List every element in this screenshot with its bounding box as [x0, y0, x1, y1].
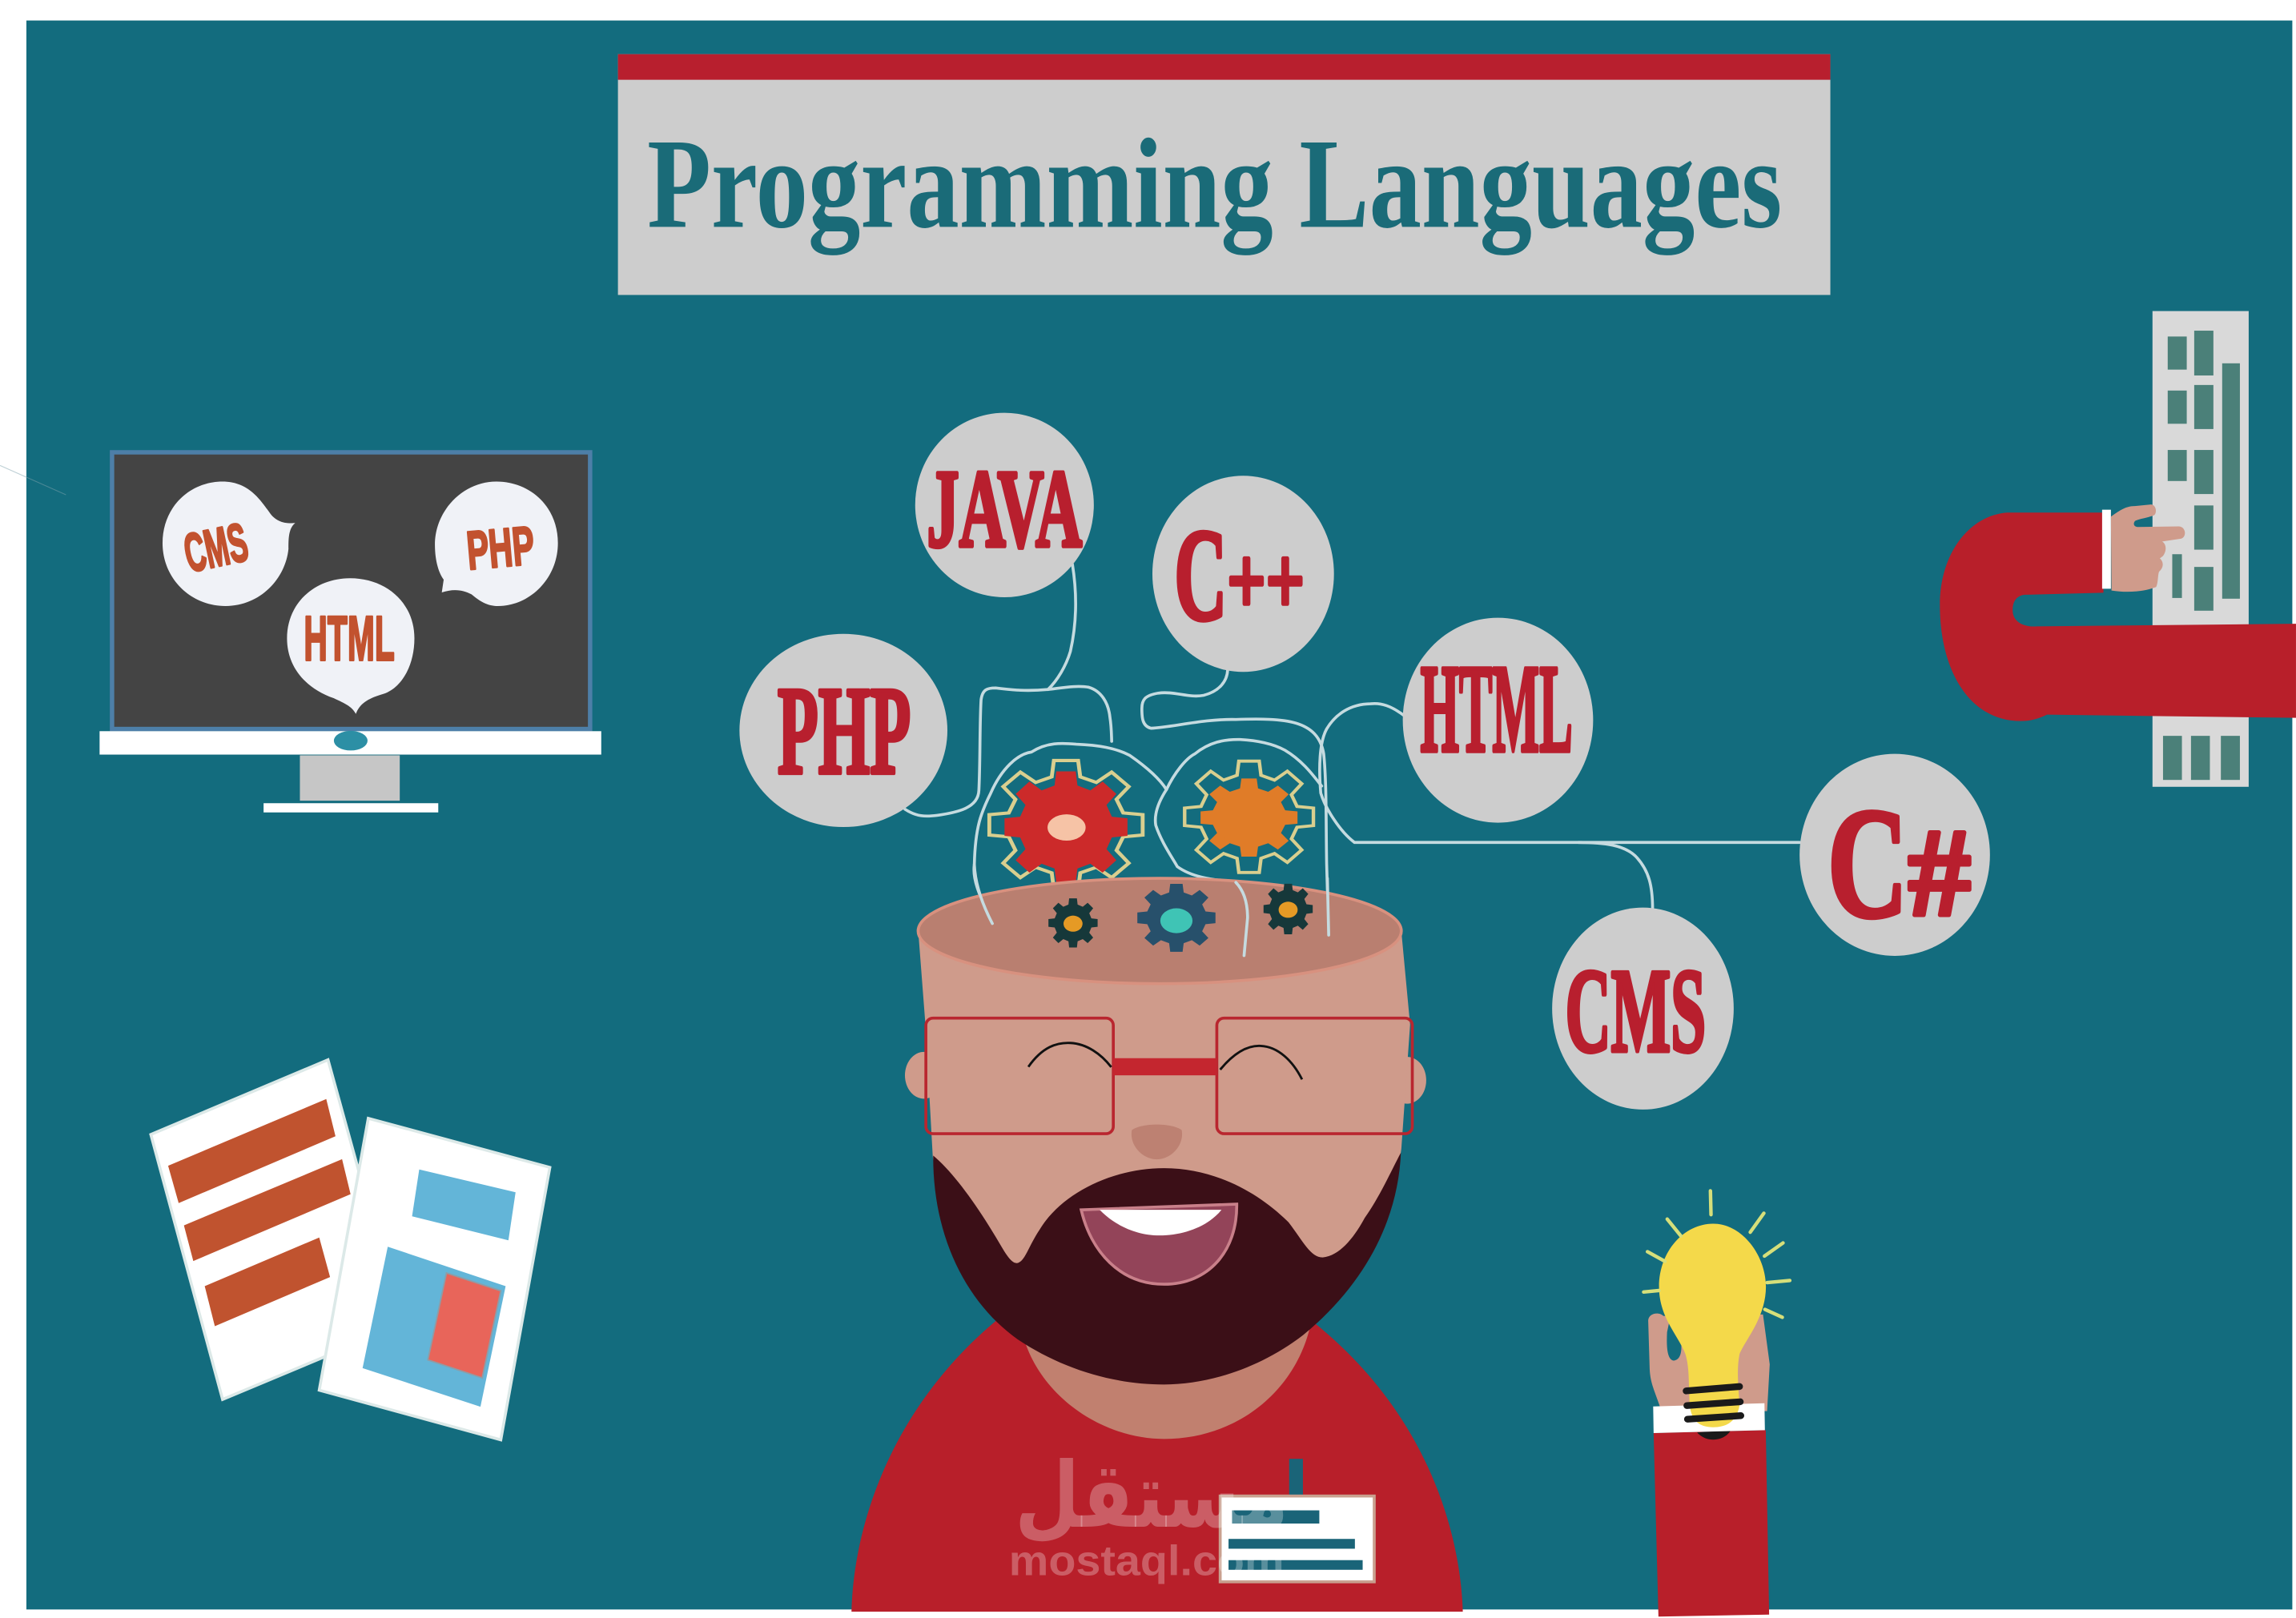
- bubble: C#: #: [1908, 804, 1971, 943]
- wires falling into head: [975, 865, 1329, 956]
- gears behind head: [989, 761, 1313, 889]
- bubble: C#: [1799, 754, 1990, 956]
- small dark gear right: [1264, 884, 1313, 934]
- monitor stand: [300, 755, 400, 801]
- bulb: [1659, 1224, 1766, 1427]
- wire: C++: [1142, 670, 1329, 935]
- bubble: JAVA: JAVA: [927, 448, 1082, 571]
- character: smiling eyes: [1028, 1043, 1302, 1079]
- illustration canvas: HTML: [1421, 640, 1573, 779]
- monitor foot: [263, 803, 438, 813]
- bubble: C++: ++: [1227, 528, 1305, 635]
- bulb stripes: [1686, 1387, 1741, 1419]
- documents icon: [151, 1060, 550, 1439]
- character: beard: [933, 1153, 1401, 1384]
- character: glasses: [926, 1018, 1413, 1134]
- wire: JAVA: [1048, 564, 1076, 689]
- wire: HTML and C#: [1320, 704, 1799, 842]
- wire: PHP: [905, 686, 1112, 816]
- speech bubble: CMS: [163, 482, 296, 606]
- back paper with bars: [151, 1060, 401, 1399]
- character: nose: [1132, 1125, 1182, 1159]
- bubble: CMS: CMS: [1566, 945, 1706, 1078]
- watermark: مستقل: [1015, 1443, 1289, 1548]
- character: face: [918, 929, 1410, 1383]
- bubble: CMS: [1552, 908, 1734, 1110]
- character: mouth: [1081, 1204, 1236, 1284]
- medium blue gear: [1137, 884, 1216, 952]
- white cuff: [1653, 1403, 1765, 1433]
- white cuff: [2102, 510, 2111, 588]
- bubble: PHP: PHP: [778, 661, 911, 801]
- hand holding light bulb: [1643, 1190, 1790, 1616]
- small dark gear left: [1048, 898, 1098, 948]
- hand pressing keyboard: [1940, 311, 2296, 787]
- bulb hand: [1648, 1314, 1770, 1411]
- small gears in head: [1048, 884, 1313, 952]
- bubble: JAVA: [915, 413, 1094, 597]
- character: shirt: [851, 1319, 1463, 1612]
- pointing hand: [2111, 504, 2185, 592]
- title text: Programming Languages: [647, 112, 1782, 255]
- lobe wires around gears: [974, 740, 1321, 956]
- character: neck: [1020, 1325, 1310, 1439]
- ID badge: [1220, 1496, 1374, 1582]
- bubble: C#: C: [1828, 776, 1908, 951]
- speech bubble: PHP: PHP: [464, 516, 537, 581]
- speech bubble: HTML: HTML: [304, 604, 395, 674]
- orange gear: [1184, 761, 1313, 873]
- thin stray line at left edge: [0, 465, 66, 495]
- monitor base bar: [99, 731, 601, 755]
- bubble: HTML: [1403, 618, 1593, 823]
- red sleeve: [1940, 512, 2296, 721]
- red gear: [989, 761, 1143, 889]
- speech bubble: CMS: CMS: [179, 512, 253, 584]
- watermark: mostaql.com: [1009, 1537, 1285, 1584]
- title banner: [618, 54, 1831, 295]
- character: open head top: [918, 878, 1401, 984]
- front paper with image blocks: [320, 1118, 550, 1439]
- monitor with speech bubbles: [99, 452, 601, 813]
- speech bubble: PHP: [435, 482, 558, 606]
- speech bubble: HTML: [287, 578, 414, 714]
- monitor power button: [334, 731, 368, 750]
- sleeve: [1654, 1430, 1769, 1616]
- keyboard: [2153, 311, 2249, 787]
- bubble: C++: C: [1174, 501, 1227, 648]
- character: ears: [905, 1052, 1426, 1104]
- watermark: [1009, 1443, 1289, 1584]
- badge lanyard: [1289, 1459, 1303, 1497]
- bulb socket tip: [1697, 1430, 1731, 1439]
- bubble: C++: [1152, 476, 1334, 672]
- bubble: PHP: [739, 634, 947, 827]
- bulb rays: [1643, 1190, 1790, 1317]
- wire: CMS: [1578, 842, 1653, 909]
- connector wires: [905, 564, 1799, 935]
